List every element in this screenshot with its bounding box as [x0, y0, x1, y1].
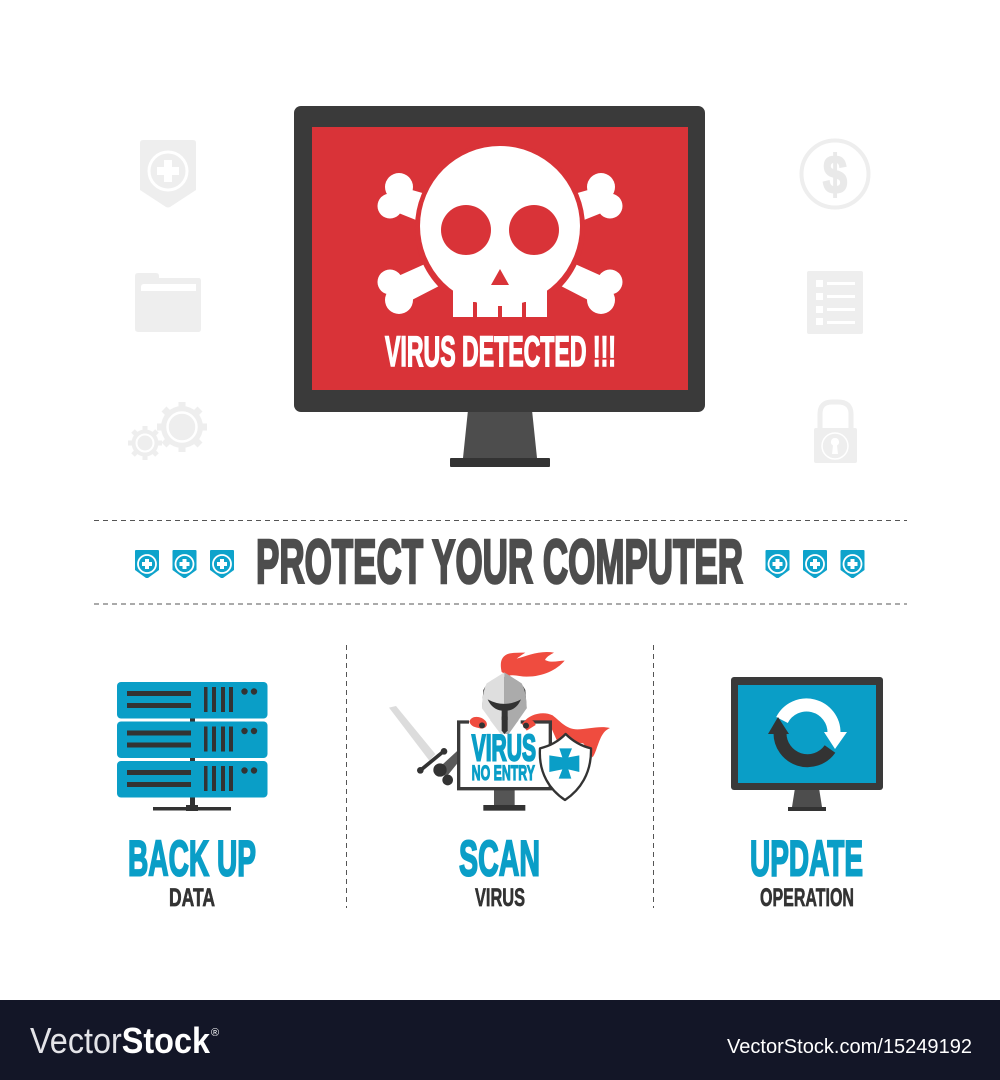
label: scan: SCAN	[459, 830, 540, 886]
icon: checklist	[807, 271, 863, 334]
helmet	[482, 672, 527, 734]
monitor frame	[294, 106, 705, 412]
panel: update operation	[731, 677, 883, 912]
icon: folder	[135, 273, 201, 332]
footer url: VectorStock.com/15249192	[727, 1035, 972, 1058]
small shields right	[766, 550, 864, 578]
icon: shield	[140, 140, 196, 208]
footer logo: VectorStock	[30, 1020, 211, 1061]
label: update: UPDATE	[750, 830, 863, 886]
icon: dollar coin: $	[823, 145, 847, 205]
alert text: VIRUS DETECTED !!!	[385, 328, 616, 376]
small shields left	[135, 550, 234, 578]
registered mark: ®	[211, 1027, 219, 1039]
cape	[524, 713, 610, 757]
icon: skull and crossbones	[378, 142, 622, 317]
panel: back up data	[117, 682, 268, 912]
title band	[94, 520, 907, 604]
label: back up: BACK UP	[128, 830, 256, 886]
monitor with virus alert	[294, 106, 705, 467]
icon: server rack	[117, 682, 268, 811]
hands	[469, 717, 536, 731]
label: operation: OPERATION	[760, 884, 854, 912]
sign text: VIRUS	[472, 727, 536, 768]
small monitor	[459, 717, 550, 811]
icon: knight with monitor, sword and shield: NO ENTRY	[472, 761, 535, 785]
ghost icons right column	[802, 140, 868, 463]
ghost icons left column	[128, 140, 207, 460]
sword	[389, 706, 461, 785]
monitor stand	[450, 410, 550, 467]
icon: knight with monitor, sword and shield	[389, 652, 610, 811]
panel: scan virus	[389, 652, 610, 912]
red screen	[312, 127, 688, 390]
icon: gears	[128, 402, 207, 460]
icon: monitor with refresh arrows	[731, 677, 883, 811]
plume	[501, 652, 565, 677]
icon: padlock	[814, 402, 857, 463]
shield with cross	[540, 734, 591, 800]
footer bar	[0, 1000, 1000, 1080]
label: data: DATA	[169, 884, 215, 912]
icon: dollar coin	[802, 140, 868, 208]
label: virus: VIRUS	[475, 884, 525, 912]
